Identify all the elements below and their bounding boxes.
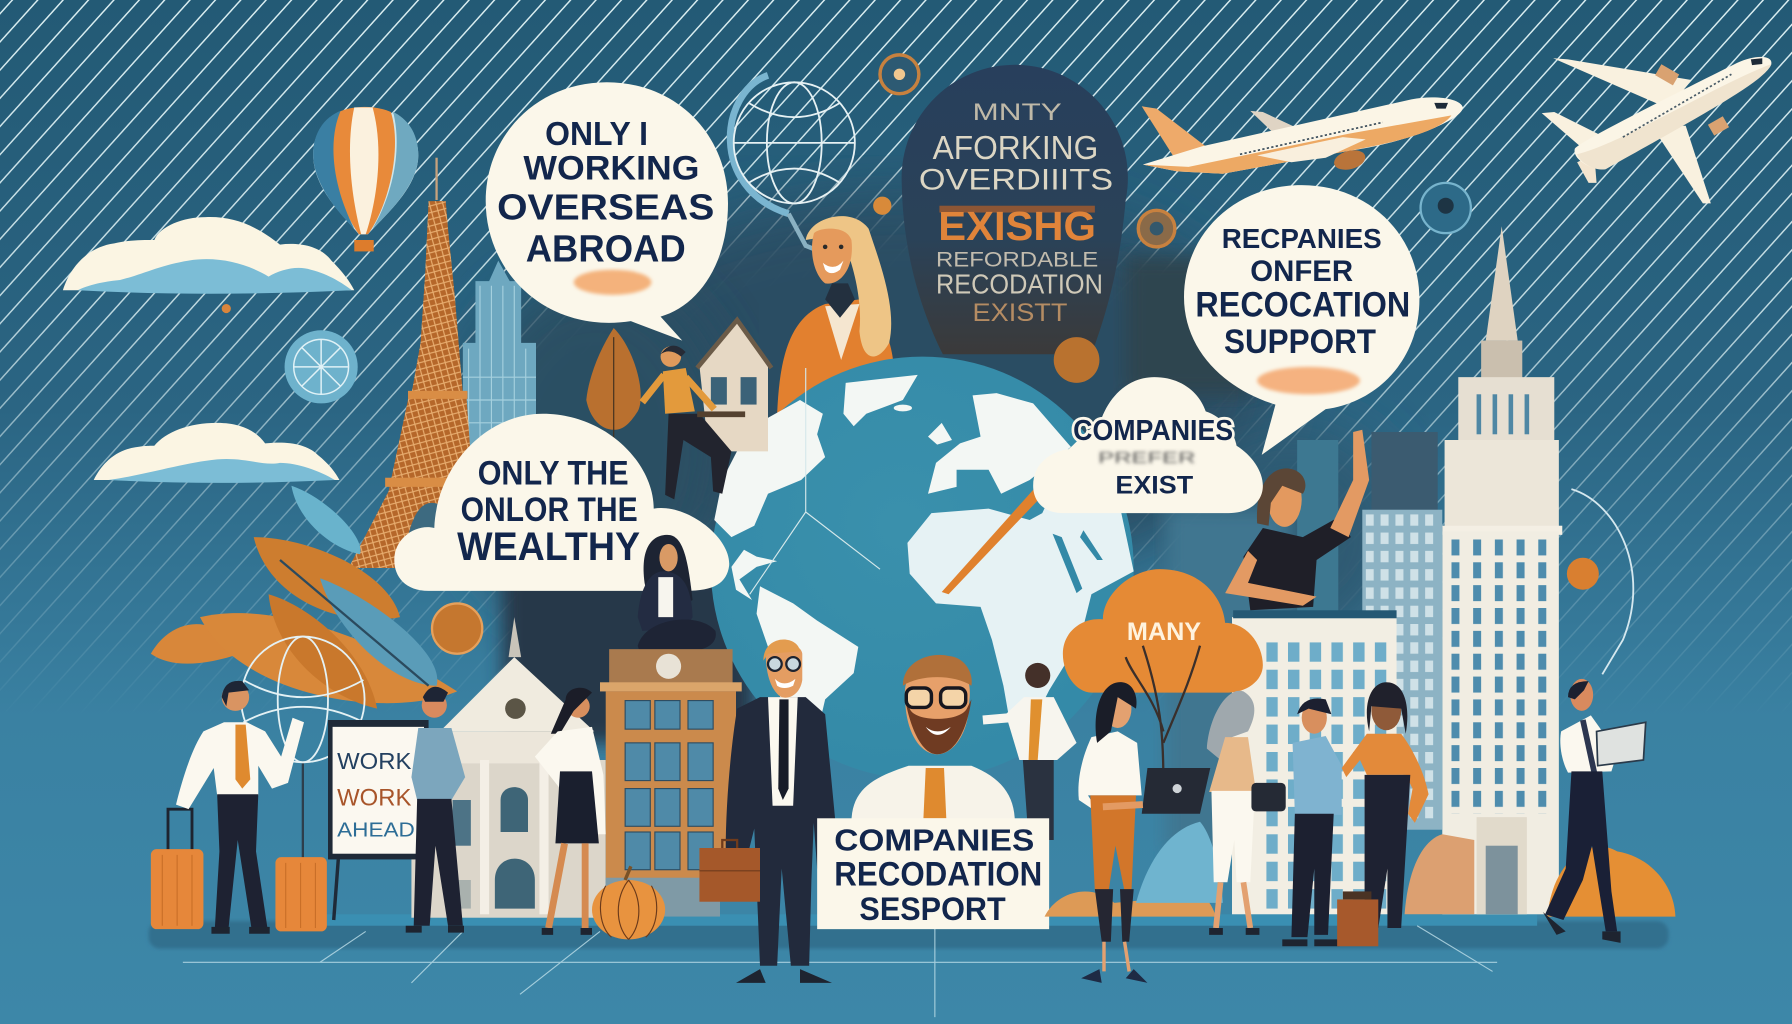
sign: work ahead: WORK <box>337 785 411 812</box>
speech bubble: relocation support: SUPPORT <box>1224 323 1376 361</box>
speech bubble: working overseas <box>486 82 728 341</box>
briefcase on floor <box>1337 891 1378 946</box>
speech bubble: working overseas: ONLY I <box>545 116 648 153</box>
cloud bubble: only the wealthy <box>394 414 729 591</box>
cloud bubble: companies exist <box>1033 377 1263 513</box>
suitcase: right <box>275 857 327 931</box>
circle text: AFORKING <box>933 130 1098 167</box>
woman in black top waving <box>1225 430 1369 610</box>
pumpkin <box>592 866 665 939</box>
speech bubble: relocation support: RECOCATION <box>1195 285 1410 325</box>
small decorations around circle <box>222 183 1633 674</box>
eiffel tower <box>349 158 482 568</box>
speech bubble: working overseas: OVERSEAS <box>497 186 714 227</box>
cloud bubble: only the wealthy: WEALTHY <box>457 525 640 569</box>
circle text: RECODATION <box>936 269 1103 300</box>
circle text: REFORDABLE <box>936 246 1098 271</box>
wire globe: top <box>730 75 855 257</box>
pen <box>942 472 1058 594</box>
man in grey jacket <box>406 687 465 933</box>
sign: work ahead: AHEAD <box>337 819 415 842</box>
big globe <box>711 357 1134 779</box>
woman with laptop <box>1078 682 1210 983</box>
tall skyscraper <box>1442 226 1562 914</box>
woman with black skirt <box>535 688 606 935</box>
sign: work ahead <box>299 720 429 920</box>
cloud: lower left <box>94 423 339 483</box>
building: orange brick <box>600 649 742 917</box>
sign: companies relocation support <box>817 818 1049 929</box>
cloud bubble: only the wealthy: ONLY THE <box>478 455 629 493</box>
circle text: MNTY <box>973 99 1062 126</box>
icon: fan wheel <box>285 330 358 403</box>
woman in orange top <box>1342 682 1429 928</box>
speech bubble: relocation support <box>1184 185 1419 455</box>
man in blue shirt <box>1251 699 1342 946</box>
airplane: cream <box>1542 57 1771 203</box>
cloud bubble: companies exist: EXIST <box>1115 472 1194 500</box>
man in black suit <box>726 640 840 983</box>
cloud bubble: companies exist: PREFER <box>1098 450 1195 467</box>
woman sitting on building <box>638 535 716 658</box>
middle office building <box>1232 610 1397 914</box>
cloud bubble: only the wealthy: ONLOR THE <box>461 491 638 529</box>
orange bushes <box>1045 822 1675 917</box>
sign: companies relocation support: SESPORT <box>859 891 1006 927</box>
icon: orange ring <box>880 55 919 94</box>
dark circle callout <box>902 65 1128 354</box>
sign: companies relocation support: COMPANIES <box>834 822 1034 857</box>
orange cloud: many: MANY <box>1127 618 1201 646</box>
speech bubble: working overseas: ABROAD <box>526 228 686 270</box>
airplane: orange tail <box>1142 97 1463 174</box>
man with orange tie <box>176 681 304 934</box>
cloud bubble: companies exist: COMPANIES <box>1073 415 1233 447</box>
sign: companies relocation support: RECODATION <box>834 856 1042 894</box>
floor <box>149 914 1669 1017</box>
suitcase: left <box>151 809 203 929</box>
cloud: upper left <box>63 217 354 294</box>
foliage: orange leaves <box>151 486 457 709</box>
wire globe: left <box>241 637 365 914</box>
icon: hot air balloon <box>313 107 418 251</box>
circle text: EXISTT <box>973 299 1067 327</box>
orange cloud: many <box>1063 569 1263 800</box>
house <box>697 320 771 451</box>
classic building <box>411 617 606 918</box>
bearded man bust <box>851 655 1015 823</box>
circle text: EXISHG <box>938 203 1096 249</box>
man walking with laptop <box>1543 679 1646 943</box>
sign: work ahead: WORK <box>337 748 411 774</box>
background city towers <box>1297 432 1442 830</box>
woman with laptop near house <box>642 320 771 499</box>
speech bubble: working overseas: WORKING <box>523 149 699 187</box>
continent: greenland and north america <box>714 375 1134 749</box>
leaf near bubble <box>586 328 641 446</box>
speech bubble: relocation support: ONFER <box>1250 255 1353 288</box>
briefcase <box>699 840 760 902</box>
circle text: OVERDIIITS <box>919 164 1113 197</box>
speech bubble: relocation support: RECPANIES <box>1222 223 1382 254</box>
circle text <box>919 99 1113 327</box>
woman in white pants <box>1207 691 1259 935</box>
skyscraper: blue <box>463 261 536 448</box>
man in background with mask <box>983 663 1077 840</box>
woman: blonde with orange jacket <box>777 216 894 414</box>
